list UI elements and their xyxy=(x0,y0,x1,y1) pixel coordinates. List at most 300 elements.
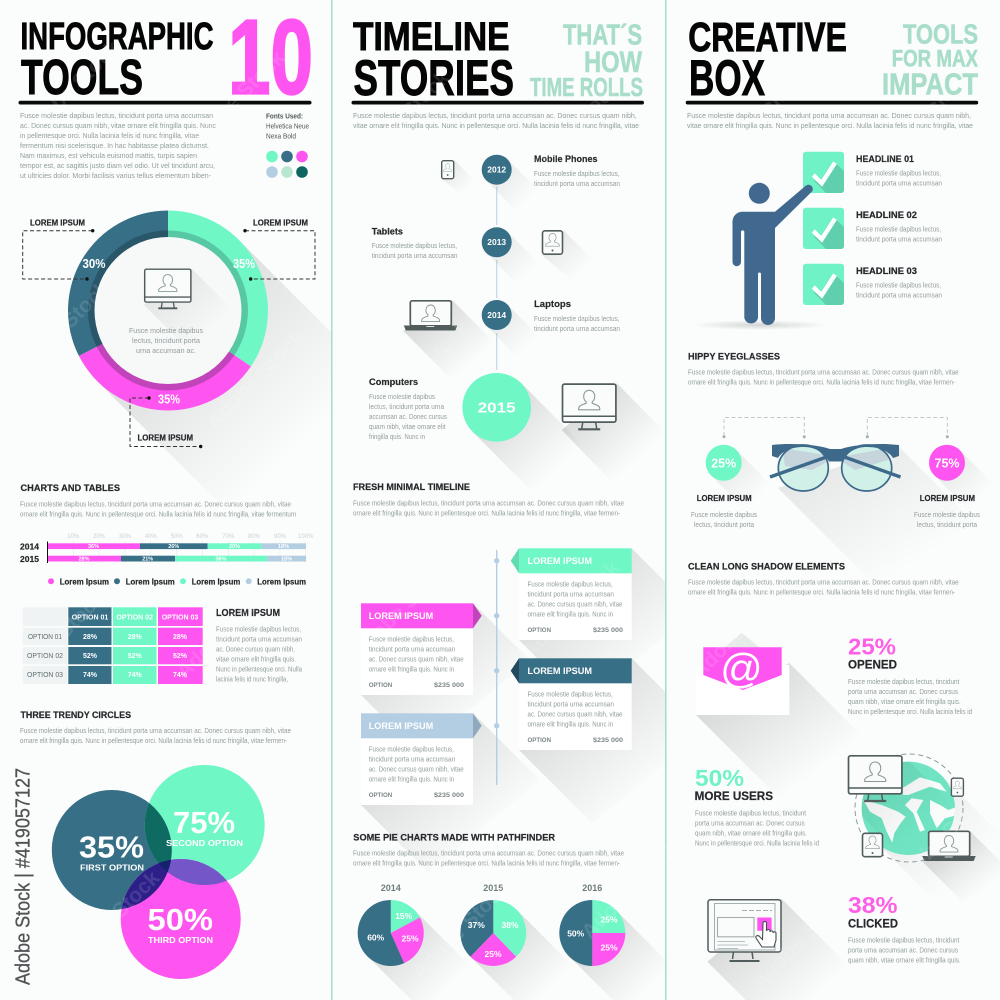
bar 2015: 21% xyxy=(142,557,153,563)
bar legend: Lorem Ipsum xyxy=(126,577,175,586)
stat: 25% opened: quam nibh, vitae ornare elit fringilla quis. xyxy=(848,697,961,706)
label left: LOREM IPSUM xyxy=(697,493,752,503)
badge 75% xyxy=(929,445,998,514)
card: mint: Fusce molestie dapibus lectus, xyxy=(528,579,613,588)
text: computers: accumsan ac. Donec cursus xyxy=(369,412,447,421)
bar 2015: 2015 xyxy=(20,554,39,564)
venn label first: 35% xyxy=(79,831,144,865)
watermark pattern: Adobe Stock xyxy=(887,786,995,894)
stat: 38% clicked xyxy=(848,892,961,965)
card: dark: LOREM IPSUM xyxy=(528,666,592,677)
table side text: tincidunt porta urna accumsan xyxy=(216,634,302,643)
fresh timeline text xyxy=(353,498,624,517)
intro text: Fusce molestie dapibus lectus, tincidunt porta urna accumsan ac. Donec cursus quam nibh, xyxy=(687,111,971,120)
venn label second: 75% xyxy=(173,806,235,840)
donut value labels: 30% xyxy=(82,257,106,271)
bar axis labels: 30% xyxy=(119,534,132,540)
subtitle: tools for max impact: TOOLS xyxy=(903,18,978,50)
bar legend: Lorem Ipsum xyxy=(60,577,109,586)
intro text: Nam maximus, est vehicula euismod mattis, turpis sapien xyxy=(20,151,197,160)
intro text xyxy=(687,111,973,130)
heading: clean long shadow elements: CLEAN LONG SHADOW ELEMENTS xyxy=(688,562,845,572)
leader left: LOREM IPSUM xyxy=(30,218,85,228)
intro text: fermentum nisi scelerisque. In hac habitasse platea dictumst. xyxy=(20,141,209,150)
label left: lectus, tincidunt porta xyxy=(694,520,755,529)
options table: 28% xyxy=(173,634,188,641)
year 2015: 2015 xyxy=(478,400,516,416)
watermark pattern: Adobe Stock xyxy=(517,556,625,664)
options table: OPTION 01 xyxy=(28,634,62,641)
year 2014: 2014 xyxy=(487,310,506,320)
stat: 25% opened: porta urna accumsan ac. Donec cursus xyxy=(848,687,958,696)
heading: hippy eyeglasses: HIPPY EYEGLASSES xyxy=(688,352,780,362)
stat: 38% clicked: CLICKED xyxy=(848,918,898,930)
watermark pattern: Adobe Stock xyxy=(202,326,310,434)
card: pink: tincidunt porta urna accumsan xyxy=(369,644,455,653)
fonts used: Fonts Used: xyxy=(266,112,303,120)
subtitle: tools for max impact xyxy=(882,18,978,101)
inner ring mint xyxy=(168,230,248,355)
watermark pattern: Adobe Stock xyxy=(7,276,115,384)
pie chart 2014: 25% xyxy=(401,933,419,943)
stat: 38% clicked: 38% xyxy=(848,892,898,918)
card: mint xyxy=(511,548,632,640)
check item 3: Fusce molestie dapibus lectus, xyxy=(856,280,941,289)
intro text: ut ultricies dolor. Morbi facilisis varius tellus elementum biben- xyxy=(20,171,212,180)
fresh timeline text: ornare elit fringilla quis. Nunc in pellentesque orci. Nulla lacinia felis id nunc fringilla, vitae fermen- xyxy=(353,508,620,517)
bar 2014: 36% xyxy=(88,544,99,550)
stock id vertical text: Adobe Stock | #419057127 xyxy=(12,768,34,985)
pie chart 2016: 25% xyxy=(600,943,618,953)
stat: 50% more users: 50% xyxy=(695,765,744,791)
donut value labels xyxy=(82,257,255,406)
subtitle: that's how time rolls: THAT´S xyxy=(563,20,642,52)
check item 2 xyxy=(803,208,942,249)
icon: email envelope xyxy=(696,633,872,798)
card: mint: $235 000 xyxy=(593,627,623,634)
card: pink: ornare elit fringilla quis. Nunc in xyxy=(369,664,454,673)
stat: 25% opened: Fusce molestie dapibus lectus, tincidunt xyxy=(848,677,959,686)
donut centre text: lectus, tincidunt porta xyxy=(132,336,201,345)
charts text xyxy=(20,499,296,518)
icon: connected globe xyxy=(848,754,1000,903)
bar 2014 xyxy=(20,542,306,552)
options table: 52% xyxy=(173,653,188,660)
pie chart 2014 xyxy=(358,884,456,998)
panel: infographic tools xyxy=(14,18,331,986)
watermark pattern: Adobe Stock xyxy=(517,76,625,184)
venn label first: FIRST OPTION xyxy=(80,863,144,873)
bar axis labels: 10% xyxy=(67,534,80,540)
table side text: LOREM IPSUM xyxy=(216,608,280,619)
stat: 38% clicked: porta urna accumsan ac. Donec cursus xyxy=(848,946,958,955)
stat: 50% more users: MORE USERS xyxy=(695,791,773,803)
intro text: ac. Donec cursus quam nibh, vitae ornare elit fringilla quis. Nunc xyxy=(20,121,216,130)
watermark pattern: Adobe Stock xyxy=(367,316,475,424)
watermark pattern: Adobe Stock xyxy=(347,66,455,174)
card: blue: ac. Donec cursus quam nibh, vitae xyxy=(369,764,464,773)
title: timeline stories: STORIES xyxy=(354,50,514,106)
watermark pattern: Adobe Stock xyxy=(877,276,985,384)
bar axis labels: 80% xyxy=(248,534,261,540)
bar axis labels: 90% xyxy=(274,534,287,540)
intro text xyxy=(353,111,639,130)
watermark pattern: Adobe Stock xyxy=(407,876,515,984)
card: mint: ornare elit fringilla quis. Nunc in xyxy=(528,609,613,618)
panel: creative box xyxy=(686,14,1000,1000)
leader left xyxy=(23,218,94,281)
year 2014 xyxy=(482,300,542,360)
card: dark: OPTION xyxy=(528,737,551,744)
monitor shadow xyxy=(144,268,236,351)
card: dark xyxy=(511,658,632,750)
text: mobile phones xyxy=(534,154,620,188)
watermark pattern: Adobe Stock xyxy=(577,836,685,944)
charts text: Fusce molestie dapibus lectus, tincidunt porta urna accumsan ac. Donec cursus quam nibh, vitae xyxy=(20,499,291,508)
badge 25% xyxy=(706,445,775,514)
check item 3: HEADLINE 03 xyxy=(856,266,917,276)
watermark pattern: Adobe Stock xyxy=(2,586,110,694)
panel: timeline stories xyxy=(351,22,665,998)
pie chart 2014: 15% xyxy=(395,911,413,921)
card: mint: ac. Donec cursus quam nibh, vitae xyxy=(528,599,622,608)
column divider left xyxy=(331,0,332,1000)
heading rule xyxy=(18,101,312,104)
watermark pattern: Adobe Stock xyxy=(347,556,455,664)
heading: fresh minimal timeline: FRESH MINIMAL TIMELINE xyxy=(353,482,470,493)
options table: OPTION 02 xyxy=(27,653,63,660)
label right: LOREM IPSUM xyxy=(920,493,975,503)
card: mint: OPTION xyxy=(528,627,551,634)
bar 2014: 26% xyxy=(168,544,179,550)
check item 2: Fusce molestie dapibus lectus, xyxy=(856,224,941,233)
watermark pattern: Adobe Stock xyxy=(687,576,795,684)
intro text: tempor est, ac sagittis justo diam vel odio. Ut vel tincidunt arcu, xyxy=(20,161,215,170)
pie chart 2015: 2015 xyxy=(483,883,503,893)
eyeglasses text: Fusce molestie dapibus lectus, tincidunt porta urna accumsan ac. Donec cursus quam nibh, vitae xyxy=(688,368,959,377)
card: dark: $235 000 xyxy=(593,737,623,744)
year 2012 xyxy=(482,155,542,215)
card: mint: tincidunt porta urna accumsan xyxy=(528,589,614,598)
stacked bar chart xyxy=(20,534,314,564)
heading: three trendy circles: THREE TRENDY CIRCLES xyxy=(20,710,131,721)
check item 1: tincidunt porta urna accumsan xyxy=(856,178,942,187)
bar axis labels: 100% xyxy=(298,534,314,540)
pie chart 2015 xyxy=(460,884,558,998)
watermark pattern: Adobe Stock xyxy=(17,36,125,144)
table side text: Fusce molestie dapibus lectus, xyxy=(216,624,301,633)
connector left xyxy=(722,417,806,438)
donut segment mint 35% xyxy=(168,210,268,366)
card: blue xyxy=(361,713,482,805)
year 2012: 2012 xyxy=(487,165,506,175)
heading rule xyxy=(352,101,644,104)
heading rule xyxy=(686,101,978,104)
icon: tablet xyxy=(542,230,598,285)
title: infographic tools xyxy=(20,16,214,105)
number 10: 10 xyxy=(228,0,313,116)
circles text: Fusce molestie dapibus lectus, tincidunt porta urna accumsan ac. Donec cursus quam nibh, vitae xyxy=(20,726,291,735)
table side text: lacinia felis id nunc fringilla, xyxy=(216,674,288,683)
table side text: ac. Donec cursus quam nibh, xyxy=(216,644,295,653)
card: pink: OPTION xyxy=(369,682,392,689)
intro text: Fusce molestie dapibus lectus, tincidunt porta urna accumsan xyxy=(20,111,213,120)
eyeglasses text xyxy=(688,368,959,387)
long shadow text: ornare elit fringilla quis. Nunc in pellentesque orci. Nulla lacinia felis id nunc fringilla, vitae fermen- xyxy=(688,588,955,597)
label left: Fusce molestie dapibus xyxy=(691,510,757,519)
subtitle: that's how time rolls: TIME ROLLS xyxy=(530,72,643,102)
stat: 25% opened xyxy=(848,633,972,716)
title: creative box: BOX xyxy=(689,50,765,106)
year 2013 xyxy=(482,227,542,288)
options table: OPTION 03 xyxy=(27,672,63,679)
label right xyxy=(914,493,980,529)
card: dark: ac. Donec cursus quam nibh, vitae xyxy=(528,709,622,718)
bar axis labels xyxy=(67,534,314,540)
donut chart xyxy=(22,210,331,478)
stat: 25% opened: OPENED xyxy=(848,660,897,672)
subtitle: tools for max impact: IMPACT xyxy=(882,66,978,101)
text: laptops: Fusce molestie dapibus lectus, xyxy=(534,314,620,323)
check item 3: tincidunt porta urna accumsan xyxy=(856,290,942,299)
bar 2014: 2014 xyxy=(20,542,39,552)
text: tablets: Tablets xyxy=(372,226,403,238)
card: blue: ornare elit fringilla quis. Nunc in xyxy=(369,774,454,783)
bar 2014: 18% xyxy=(278,544,289,550)
options table: 74% xyxy=(128,672,142,679)
bar 2015: 36% xyxy=(215,557,227,563)
timeline of devices xyxy=(369,154,665,497)
colour swatches xyxy=(266,151,308,178)
card: blue: OPTION xyxy=(369,792,392,799)
options table: 28% xyxy=(83,634,98,641)
year 2015 xyxy=(462,373,586,497)
donut centre disc xyxy=(94,237,242,384)
circles text: ornare elit fringilla quis. Nunc in pellentesque orci. Nulla lacinia felis id nunc fringilla, vitae fermen- xyxy=(20,736,287,745)
bar 2015: 15% xyxy=(281,557,292,563)
text: mobile phones: Fusce molestie dapibus lectus, xyxy=(534,169,620,178)
check item 3 xyxy=(803,264,942,305)
label left xyxy=(691,493,757,529)
title: timeline stories: TIMELINE xyxy=(353,15,510,59)
title: creative box xyxy=(688,14,847,106)
fonts used xyxy=(266,112,309,140)
text: tablets: tincidunt porta urna accumsan xyxy=(372,251,458,260)
bar axis labels: 40% xyxy=(145,534,157,540)
bar 2015 xyxy=(20,554,306,564)
heading: pie charts: SOME PIE CHARTS MADE WITH PATHFINDER xyxy=(353,832,555,844)
venn label third: THIRD OPTION xyxy=(148,935,213,945)
table side text xyxy=(216,608,303,683)
subtitle: that's how time rolls xyxy=(530,20,643,102)
text: tablets xyxy=(372,226,458,260)
card: mint: LOREM IPSUM xyxy=(528,556,592,567)
card: pink: $235 000 xyxy=(434,682,464,689)
options table: OPTION 02 xyxy=(116,615,153,622)
donut long shadow xyxy=(99,240,331,478)
watermark pattern: Adobe Stock xyxy=(707,296,815,404)
pie chart 2016 xyxy=(559,884,658,998)
venn diagram xyxy=(52,765,265,979)
venn label second: SECOND OPTION xyxy=(166,838,243,848)
text: tablets: Fusce molestie dapibus lectus, xyxy=(372,241,457,250)
pie chart 2016: 50% xyxy=(567,928,585,938)
bar axis labels: 70% xyxy=(222,534,235,540)
bar 2015: 28% xyxy=(78,557,90,563)
check item 1: HEADLINE 01 xyxy=(856,154,914,164)
pie chart 2014: 60% xyxy=(367,933,385,943)
intro text xyxy=(20,111,216,180)
text: computers: Computers xyxy=(369,377,418,388)
card: blue: tincidunt porta urna accumsan xyxy=(369,754,455,763)
stat: 50% more users: porta urna accumsan ac. Donec cursus xyxy=(695,818,805,827)
options table: OPTION 03 xyxy=(162,615,198,622)
watermark pattern: Adobe Stock xyxy=(537,256,645,364)
title: infographic tools: TOOLS xyxy=(21,51,143,105)
pie charts text: ornare elit fringilla quis. Nunc in pellentesque orci. Nulla lacinia felis id nunc fringilla, vitae fermen- xyxy=(353,859,620,868)
bar legend: Lorem Ipsum xyxy=(192,577,240,586)
leader bottom xyxy=(130,396,202,448)
stat: 25% opened: Nunc in pellentesque orci. Nulla lacinia felis id xyxy=(848,707,972,716)
options table xyxy=(23,607,203,684)
column divider right xyxy=(665,0,666,1000)
donut centre text: urna accumsan ac. xyxy=(136,346,196,355)
label right: lectus, tincidunt porta xyxy=(917,520,978,529)
venn label third: 50% xyxy=(148,903,213,937)
year 2013: 2013 xyxy=(487,237,506,247)
pie chart 2014: 2014 xyxy=(381,883,401,893)
card: dark: ornare elit fringilla quis. Nunc in xyxy=(528,719,613,728)
text: laptops xyxy=(534,299,620,333)
icon: person pointing xyxy=(692,183,828,330)
bar 2014: 20% xyxy=(229,544,240,550)
icon: email envelope: @ xyxy=(720,645,763,692)
icon: eyeglasses xyxy=(770,444,936,548)
card: blue: $235 000 xyxy=(434,792,464,799)
donut segment dark 30% xyxy=(68,210,168,356)
subtitle: that's how time rolls: HOW xyxy=(584,46,643,79)
title: creative box: CREATIVE xyxy=(688,14,847,60)
long shadow text xyxy=(688,578,959,597)
vertical card timeline xyxy=(361,548,665,860)
title: infographic tools: INFOGRAPHIC xyxy=(20,16,214,58)
intro text: in pellentesque orci. Nulla lacinia felis id nunc fringilla, vitae xyxy=(20,131,199,140)
fonts used: Nexa Bold xyxy=(266,132,296,140)
check item 2: tincidunt porta urna accumsan xyxy=(856,234,942,243)
card: pink: ac. Donec cursus quam nibh, vitae xyxy=(369,654,464,663)
inner ring dark xyxy=(88,230,168,347)
intro text: vitae ornare elit fringilla quis. Nunc in pellentesque orci. Nulla lacinia felis id nunc fringilla, vitae xyxy=(687,121,973,130)
text: computers xyxy=(369,377,447,441)
card: blue: Fusce molestie dapibus lectus, xyxy=(369,744,454,753)
text: computers: fringilla quis. Nunc in xyxy=(369,432,425,441)
stat: 50% more users: Fusce molestie dapibus lectus, tincidunt xyxy=(695,808,806,817)
leader right xyxy=(243,218,315,281)
leader bottom: LOREM IPSUM xyxy=(138,434,193,442)
text: laptops: tincidunt porta urna accumsan xyxy=(534,324,620,333)
subtitle: tools for max impact: FOR MAX xyxy=(892,46,978,73)
watermark pattern: Adobe Stock xyxy=(182,46,290,154)
options table: OPTION 01 xyxy=(72,615,108,622)
options table: 28% xyxy=(128,634,142,641)
watermark pattern: Adobe Stock xyxy=(227,886,335,994)
table side text: Nunc in pellentesque orci. Nulla xyxy=(216,664,303,673)
donut segment pink 35% xyxy=(79,310,251,410)
inner ring pink xyxy=(97,310,234,390)
check item 2: HEADLINE 02 xyxy=(856,210,917,220)
text: mobile phones: tincidunt porta urna accumsan xyxy=(534,179,620,188)
venn label second xyxy=(166,806,243,848)
text: mobile phones: Mobile Phones xyxy=(534,154,598,165)
watermark pattern: Adobe Stock xyxy=(682,86,790,194)
options table: 74% xyxy=(83,672,98,679)
donut value labels: 35% xyxy=(233,257,255,271)
donut value labels: 35% xyxy=(158,392,180,406)
stat: 50% more users: Nunc in pellentesque orci. Nulla lacinia felis id xyxy=(695,838,819,847)
card: blue: LOREM IPSUM xyxy=(369,721,433,732)
text: computers: quam nibh, vitae ornare elit xyxy=(369,422,446,431)
text: computers: lectus, tincidunt porta urna xyxy=(369,402,445,411)
intro text: vitae ornare elit fringilla quis. Nunc in pellentesque orci. Nulla lacinia felis id nunc fringilla, vitae xyxy=(353,121,639,130)
table side text: vitae ornare elit fringilla quis. xyxy=(216,654,296,663)
stat: 50% more users xyxy=(695,765,819,847)
stat: 50% more users: quam nibh, vitae ornare elit fringilla quis. xyxy=(695,828,807,837)
icon: phone xyxy=(441,160,478,197)
bar legend xyxy=(48,577,306,586)
timeline connector xyxy=(496,186,498,370)
stat: 38% clicked: quam nibh, vitae ornare elit fringilla quis. xyxy=(848,956,961,965)
heading: charts and tables: CHARTS AND TABLES xyxy=(20,483,120,494)
charts text: ornare elit fringilla quis. Nunc in pellentesque orci. Nulla lacinia felis id nunc fringilla, vitae fermentum xyxy=(20,509,296,518)
card: dark: Fusce molestie dapibus lectus, xyxy=(528,689,613,698)
intro text: Fusce molestie dapibus lectus, tincidunt porta urna accumsan ac. Donec cursus quam nibh, xyxy=(353,111,637,120)
check item 1: Fusce molestie dapibus lectus, xyxy=(856,168,941,177)
options table: 74% xyxy=(173,672,188,679)
fresh timeline text: Fusce molestie dapibus lectus, tincidunt porta urna accumsan ac. Donec cursus quam nibh, vitae xyxy=(353,498,624,507)
badge 75%: 75% xyxy=(934,456,960,470)
card: dark: tincidunt porta urna accumsan xyxy=(528,699,614,708)
watermark pattern: Adobe Stock xyxy=(847,86,955,194)
title: timeline stories xyxy=(353,15,514,106)
pie chart 2015: 38% xyxy=(501,920,519,930)
text: computers: Fusce molestie dapibus xyxy=(369,392,435,401)
stat: 25% opened: 25% xyxy=(848,633,896,659)
pie chart 2016: 25% xyxy=(600,914,618,924)
bar axis labels: 60% xyxy=(196,534,209,540)
pie charts text: Fusce molestie dapibus lectus, tincidunt porta urna accumsan ac. Donec cursus quam nibh, vitae xyxy=(353,849,624,858)
text: laptops: Laptops xyxy=(534,299,571,310)
pie charts text xyxy=(353,849,624,868)
checklist xyxy=(803,152,942,305)
icon: laptop xyxy=(403,300,500,380)
bar axis labels: 20% xyxy=(93,534,106,540)
watermark pattern: Adobe Stock xyxy=(57,866,165,974)
bar legend: Lorem Ipsum xyxy=(257,577,306,586)
donut centre text: Fusce molestie dapibus xyxy=(129,326,203,335)
pie chart 2015: 25% xyxy=(484,949,502,959)
card: pink: Fusce molestie dapibus lectus, xyxy=(369,634,454,643)
watermark pattern: Adobe Stock xyxy=(857,536,965,644)
connector right xyxy=(866,417,949,438)
donut centre text xyxy=(129,326,203,355)
leader right: LOREM IPSUM xyxy=(253,218,308,228)
options table: 52% xyxy=(83,653,98,660)
card: pink: LOREM IPSUM xyxy=(369,611,433,622)
long shadow text: Fusce molestie dapibus lectus, tincidunt porta urna accumsan ac. Donec cursus quam nibh, vitae xyxy=(688,578,959,587)
icon: computer xyxy=(562,383,665,483)
fonts used: Helvetica Neue xyxy=(266,122,309,130)
icon: monitor xyxy=(145,269,191,308)
